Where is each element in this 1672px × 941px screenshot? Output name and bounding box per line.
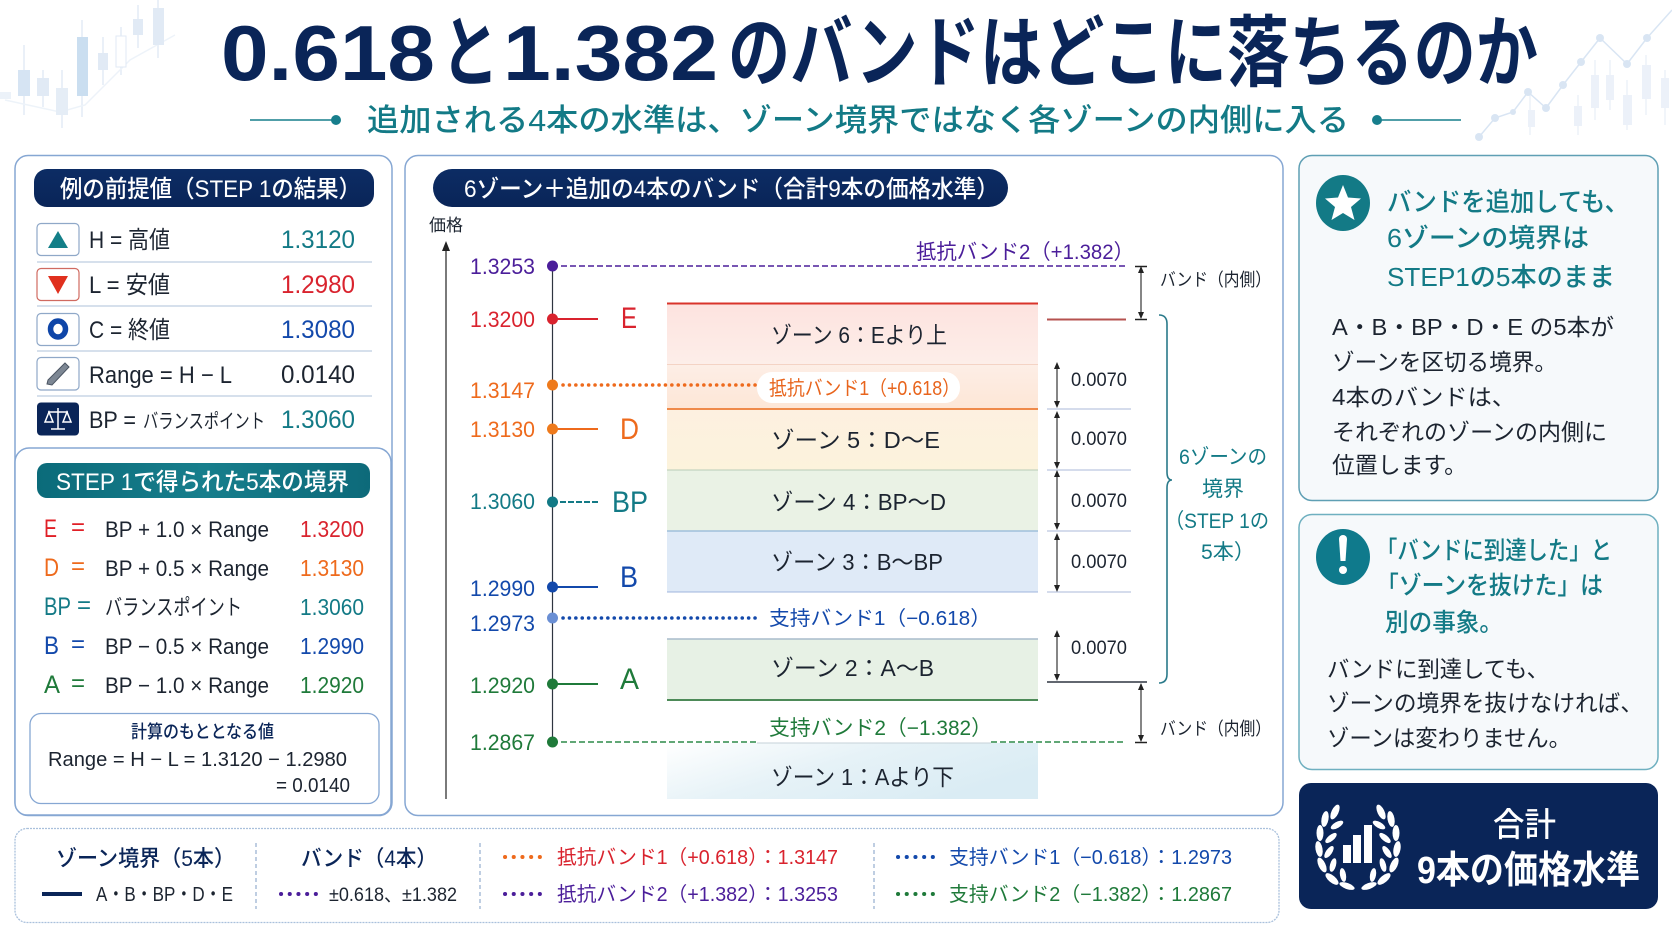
level: E: 1.3200 — [470, 307, 535, 332]
heading: key point: 6ゾーンの境界は — [1387, 223, 1589, 253]
level: B — [470, 561, 638, 601]
row: B: B — [44, 632, 59, 660]
level: resistance band 1: 1.3147 — [470, 378, 535, 403]
level: B: B — [620, 561, 638, 594]
body: key point: A・B・BP・D・E の5本が — [1332, 314, 1614, 340]
price axis arrow — [442, 241, 450, 799]
legend: zone boundaries — [42, 846, 235, 906]
zone 4 — [667, 470, 1038, 531]
level: D — [470, 413, 639, 446]
decorative candlestick chart left — [0, 0, 175, 128]
icon: exclamation — [1316, 529, 1370, 585]
legend: bands — [281, 846, 457, 906]
zone 6 — [667, 303, 1038, 365]
row: high — [37, 224, 355, 256]
level: resistance band 1 — [470, 372, 960, 403]
row: E — [44, 514, 364, 543]
zone 1: ゾーン 1：Aより下 — [771, 764, 954, 790]
dimension values: 0.0070 — [1071, 429, 1127, 450]
zone 1 — [667, 743, 1038, 799]
heading: caution: 「ゾーンを抜けた」は — [1376, 572, 1603, 600]
label: six zones boundaries: 5本） — [1201, 541, 1255, 564]
row: close: 1.3080 — [281, 316, 355, 344]
row: A: = — [71, 670, 85, 697]
row: balance point — [37, 402, 355, 436]
band gap shading — [667, 365, 1038, 409]
row: balance point: バランスポイント — [143, 410, 265, 433]
band inside arrow bottom — [1135, 683, 1271, 742]
callout: range calculation: = 0.0140 — [276, 775, 350, 797]
row: low: L = 安値 — [89, 272, 170, 299]
price line — [552, 266, 554, 742]
level: support band 2: 1.2867 — [470, 730, 535, 755]
row: high: H = 高値 — [89, 227, 170, 254]
row: range: Range = H − L — [89, 362, 232, 389]
level: resistance band 2: 抵抗バンド2（+1.382） — [916, 241, 1134, 264]
legend panel — [15, 828, 1279, 922]
heading: five boundaries: STEP 1で得られた5本の境界 — [56, 469, 349, 496]
legend: zone boundaries: A・B・BP・D・E — [96, 884, 233, 906]
row: D: D — [44, 554, 59, 582]
axis label: 価格 — [429, 216, 463, 235]
level: E — [470, 302, 637, 335]
callout: range calculation — [30, 714, 379, 804]
level: support band 2: 支持バンド2（−1.382） — [769, 717, 992, 740]
title: と — [441, 9, 499, 97]
level: support band 2 — [470, 717, 1126, 755]
row: A — [44, 670, 364, 699]
dimension values: 0.0070 — [1071, 491, 1127, 512]
dimension: reference lines — [1047, 320, 1147, 682]
row: D: 1.3130 — [300, 555, 364, 581]
body: key point — [1332, 314, 1614, 478]
level: A: A — [620, 663, 639, 696]
level: E: E — [621, 302, 637, 335]
dimension values — [1071, 370, 1127, 659]
legend: zone boundaries: ゾーン境界（5本） — [56, 846, 235, 871]
row: balance point: BP = — [89, 407, 136, 434]
level: resistance band 1: 抵抗バンド1（+0.618） — [769, 377, 960, 400]
icon: star — [1316, 175, 1370, 231]
subtitle: 追加される4本の水準は、ゾーン境界ではなく各ゾーンの内側に入る — [367, 103, 1349, 138]
text: total: 9本の価格水準 — [1417, 850, 1640, 892]
icon: laurel with bars — [1314, 803, 1402, 892]
row: D — [44, 553, 364, 582]
body: key point: 4本のバンドは、 — [1332, 384, 1516, 410]
callout: range calculation: Range = H − L = 1.3120 − 1.2980 — [48, 749, 347, 771]
zone 3: ゾーン 3：B～BP — [771, 549, 943, 575]
body: key point: ゾーンを区切る境界。 — [1332, 349, 1557, 375]
row: B: BP − 0.5 × Range — [105, 634, 269, 659]
zone 5: ゾーン 5：D～E — [771, 427, 940, 453]
row: E: E — [44, 515, 57, 543]
text: total — [1417, 806, 1640, 892]
row: BP: = — [77, 592, 91, 619]
heading: key point: バンドを追加しても、 — [1387, 187, 1629, 217]
row: close — [37, 314, 355, 346]
panel: key point — [1299, 156, 1658, 500]
heading: premises: 例の前提値（STEP 1の結果） — [60, 176, 361, 203]
level: support band 1: 支持バンド1（−0.618） — [769, 607, 991, 630]
level: D: D — [620, 413, 639, 446]
row: BP: バランスポイント — [105, 595, 242, 620]
row: close: C = 終値 — [89, 317, 170, 344]
row: A: BP − 1.0 × Range — [105, 673, 269, 698]
body: key point: 位置します。 — [1332, 452, 1467, 478]
panel: caution — [1299, 514, 1658, 770]
row: BP: BP — [44, 593, 71, 621]
level: resistance band 2 — [470, 241, 1134, 279]
row: BP — [44, 592, 364, 621]
body: caution: ゾーンは変わりません。 — [1327, 725, 1571, 751]
level: D: 1.3130 — [470, 417, 535, 442]
body: caution — [1327, 656, 1643, 751]
heading: caution — [1376, 537, 1612, 637]
panel: five boundaries — [15, 448, 391, 815]
level: support band 1: 1.2973 — [470, 611, 535, 636]
row: B — [44, 631, 364, 660]
row: B: = — [71, 631, 85, 658]
level: BP: 1.3060 — [470, 489, 535, 514]
panel: central chart — [405, 156, 1283, 816]
legend: support band 1: 支持バンド1（−0.618）：1.2973 — [949, 846, 1232, 869]
zone 4: ゾーン 4：BP～D — [771, 489, 946, 515]
row: D: BP + 0.5 × Range — [105, 556, 269, 581]
heading: premises — [34, 169, 374, 207]
level: A: 1.2920 — [470, 673, 535, 698]
row: A: 1.2920 — [300, 672, 364, 698]
band inside arrow bottom: バンド（内側） — [1160, 719, 1271, 739]
level: BP: BP — [612, 486, 648, 519]
row: E: BP + 1.0 × Range — [105, 517, 269, 542]
level: B: 1.2990 — [470, 576, 535, 601]
row: high: 1.3120 — [281, 226, 355, 254]
row: low: 1.2980 — [281, 271, 355, 299]
heading: caution: 別の事象。 — [1385, 609, 1503, 637]
title: 0.618 — [221, 9, 435, 97]
row: balance point: 1.3060 — [281, 406, 355, 434]
body: caution: バンドに到達しても、 — [1327, 656, 1549, 682]
brace: six zones — [1159, 315, 1172, 683]
zone 6: ゾーン 6：Eより上 — [771, 322, 947, 348]
dimension values: 0.0070 — [1071, 370, 1127, 391]
callout: range calculation: 計算のもととなる値 — [131, 722, 274, 742]
row: low — [37, 268, 355, 300]
heading: chart: 6ゾーン＋追加の4本のバンド（合計9本の価格水準） — [464, 176, 999, 203]
title — [221, 9, 1538, 97]
zone 2: ゾーン 2：A～B — [771, 655, 934, 681]
legend: resistance band 1: 抵抗バンド1（+0.618）：1.3147 — [557, 846, 838, 869]
panel: total — [1299, 783, 1658, 909]
dimension arrows: 0.0070 — [1054, 362, 1060, 681]
row: E: 1.3200 — [300, 516, 364, 542]
label: six zones boundaries: 6ゾーンの — [1179, 446, 1267, 469]
heading: key point: STEP1の5本のまま — [1387, 262, 1615, 292]
row: BP: 1.3060 — [300, 594, 364, 620]
row: range — [37, 358, 355, 390]
body: key point: それぞれのゾーンの内側に — [1332, 419, 1607, 445]
dimension values: 0.0070 — [1071, 552, 1127, 573]
label: six zones boundaries — [1165, 446, 1269, 564]
label: six zones boundaries: （STEP 1の — [1165, 510, 1269, 533]
zone 2 — [667, 639, 1038, 700]
level: resistance band 2: 1.3253 — [470, 254, 535, 279]
row: A: A — [44, 671, 60, 699]
decorative candlestick chart right — [1475, 10, 1672, 141]
panel: premises — [15, 156, 392, 816]
legend: bands: ±0.618、±1.382 — [329, 885, 457, 906]
band inside arrow top — [1135, 266, 1271, 320]
dimension values: 0.0070 — [1071, 638, 1127, 659]
legend: bands: バンド（4本） — [301, 846, 437, 871]
level: support band 1 — [470, 607, 991, 636]
heading: chart — [433, 169, 1008, 207]
level: BP — [470, 486, 648, 519]
label: six zones boundaries: 境界 — [1202, 478, 1244, 501]
zone 5 — [667, 409, 1038, 470]
heading: key point — [1387, 187, 1629, 292]
heading: caution: 「バンドに到達した」と — [1376, 537, 1612, 565]
legend: support band 2: 支持バンド2（−1.382）：1.2867 — [949, 883, 1232, 906]
row: D: = — [71, 553, 85, 580]
row: range: 0.0140 — [281, 361, 355, 389]
legend: resistance band 2: 抵抗バンド2（+1.382）：1.3253 — [557, 883, 838, 906]
band inside arrow top: バンド（内側） — [1160, 270, 1271, 290]
row: B: 1.2990 — [300, 633, 364, 659]
zone 3 — [667, 531, 1038, 592]
row: E: = — [71, 514, 85, 541]
text: total: 合計 — [1493, 806, 1556, 843]
title: 1.382 — [503, 9, 718, 97]
level: A — [470, 663, 639, 698]
body: caution: ゾーンの境界を抜けなければ、 — [1327, 690, 1643, 716]
